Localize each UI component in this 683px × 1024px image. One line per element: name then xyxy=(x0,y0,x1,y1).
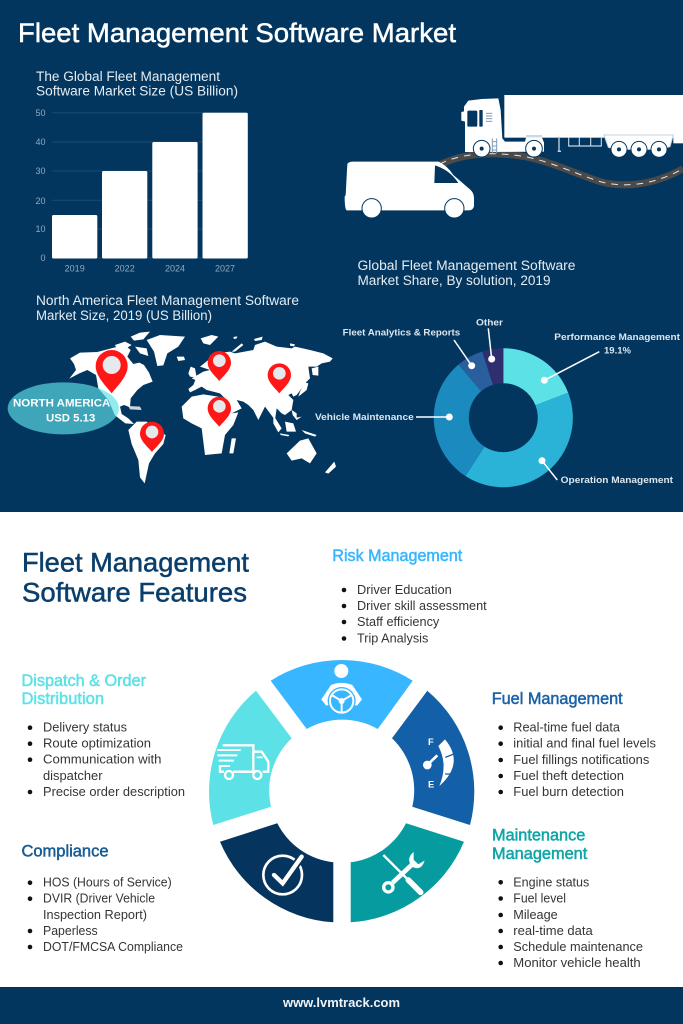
segment: risk management with driver icon xyxy=(271,660,413,729)
donut labels xyxy=(315,318,681,486)
illustration: road, truck and van xyxy=(345,95,683,218)
bar chart: market size: 2019 xyxy=(65,264,85,274)
heading: global market size: Software Market Size (US Billion) xyxy=(36,84,238,99)
feature: fuel management: Real-time fuel data xyxy=(513,720,621,735)
segment: maintenance management with tools icon xyxy=(351,823,464,922)
world map with pins xyxy=(8,332,336,483)
panel: software features xyxy=(0,512,683,987)
donut labels: Performance Management xyxy=(554,332,681,343)
feature: compliance: DVIR (Driver Vehicle xyxy=(43,891,155,906)
heading: north america market size xyxy=(36,293,299,323)
feature: compliance: HOS (Hours of Service) xyxy=(43,875,172,890)
feature: maintenance management: Fuel level xyxy=(513,890,566,906)
feature: dispatch and order distribution: Dispatch & Order xyxy=(22,672,146,690)
donut labels: Other xyxy=(476,318,503,329)
callout: north america: NORTH AMERICA xyxy=(13,398,111,410)
feature: maintenance management xyxy=(492,827,643,970)
bar chart: market size: 2022 xyxy=(115,264,135,274)
heading: north america market size: North America Fleet Management Software xyxy=(36,293,299,308)
donut labels: Vehicle Maintenance xyxy=(315,412,414,423)
panel: market overview xyxy=(0,0,683,512)
feature: dispatch and order distribution: Distribution xyxy=(22,690,104,708)
feature: maintenance management: Maintenance xyxy=(492,827,585,845)
donut labels: Operation Management xyxy=(561,475,674,486)
bar chart: market size: 40 xyxy=(35,137,46,147)
donut labels: 19.1% xyxy=(604,346,632,357)
feature: dispatch and order distribution: dispatcher xyxy=(43,768,103,783)
bar chart: market size: 50 xyxy=(35,108,46,118)
feature: risk management: Staff efficiency xyxy=(357,614,440,629)
feature: compliance: Compliance xyxy=(22,843,108,861)
heading: global market size xyxy=(36,69,238,99)
feature: risk management: Driver skill assessment xyxy=(357,598,487,613)
feature: compliance: Inspection Report) xyxy=(43,907,147,922)
feature: fuel management: Fuel Management xyxy=(492,690,623,708)
donut chart: market share by solution xyxy=(315,318,681,487)
bar chart: market size xyxy=(35,108,248,274)
road xyxy=(435,154,683,185)
feature: compliance xyxy=(22,843,183,954)
bar chart: market size: 30 xyxy=(35,166,46,176)
feature: maintenance management: Mileage xyxy=(513,907,558,922)
continents xyxy=(69,332,336,483)
title: Fleet Management Software Market xyxy=(18,18,456,48)
feature: maintenance management: Management xyxy=(492,845,588,863)
feature: fuel management: Fuel theft detection xyxy=(513,768,624,783)
feature: maintenance management: Schedule maintenance xyxy=(513,939,643,954)
heading: market share xyxy=(358,258,576,288)
heading: features: Fleet Management xyxy=(22,548,250,578)
features wheel xyxy=(209,660,474,922)
feature: dispatch and order distribution: Communication with xyxy=(43,752,162,767)
feature: risk management: Trip Analysis xyxy=(357,630,429,646)
feature: risk management xyxy=(332,547,487,646)
heading: global market size: The Global Fleet Management xyxy=(36,69,220,84)
feature: fuel management: initial and final fuel levels xyxy=(513,736,656,751)
feature: maintenance management: real-time data xyxy=(513,923,593,938)
feature: fuel management xyxy=(492,690,656,799)
feature: compliance: DOT/FMCSA Compliance xyxy=(43,939,183,954)
icon: van xyxy=(345,162,474,218)
icon: truck xyxy=(461,95,683,157)
segment: fuel management with gauge icon xyxy=(392,691,474,825)
feature: compliance: Paperless xyxy=(43,923,98,938)
segment: other xyxy=(482,348,503,385)
heading: market share: Global Fleet Management Software xyxy=(358,258,576,273)
feature: risk management: Risk Management xyxy=(332,547,463,565)
feature: dispatch and order distribution: Route optimization xyxy=(43,736,151,751)
footer: website xyxy=(0,987,683,1024)
bar chart: market size: 0 xyxy=(40,253,46,263)
segment: fuel management with gauge icon: E xyxy=(428,780,434,790)
feature: fuel management: Fuel burn detection xyxy=(513,784,624,799)
donut leader lines xyxy=(416,328,599,480)
heading: features: Software Features xyxy=(22,578,247,608)
heading: features xyxy=(22,548,250,608)
heading: north america market size: Market Size, 2019 (US Billion) xyxy=(36,308,212,323)
segment: operation management xyxy=(465,393,573,487)
bar chart: market size: 2027 xyxy=(215,264,235,274)
segment: compliance with check icon xyxy=(220,823,333,922)
feature: dispatch and order distribution: Delivery status xyxy=(43,720,127,735)
callout: north america: USD 5.13 xyxy=(46,412,95,424)
feature: maintenance management: Monitor vehicle health xyxy=(513,955,641,970)
callout: north america xyxy=(8,382,119,434)
bar chart: market size: 10 xyxy=(35,224,46,234)
segment: performance management xyxy=(503,348,568,405)
heading: market share: Market Share, By solution, 2019 xyxy=(358,273,550,288)
feature: risk management: Driver Education xyxy=(357,582,452,597)
bar chart: market size: 2024 xyxy=(165,264,185,274)
map pins xyxy=(96,350,291,452)
footer: website: www.lvmtrack.com xyxy=(282,995,400,1010)
segment: fuel management with gauge icon: F xyxy=(428,737,434,747)
feature: maintenance management: Engine status xyxy=(513,874,590,889)
feature: fuel management: Fuel fillings notifications xyxy=(513,752,650,767)
segment: dispatch with delivery truck icon xyxy=(209,691,292,825)
donut labels: Fleet Analytics & Reports xyxy=(343,328,460,339)
segment: vehicle maintenance xyxy=(434,364,484,476)
feature: dispatch and order distribution: Precise order description xyxy=(43,784,185,799)
bar chart: market size: 20 xyxy=(35,196,46,206)
segment: fleet analytics xyxy=(459,352,493,391)
feature: dispatch and order distribution xyxy=(22,672,185,799)
